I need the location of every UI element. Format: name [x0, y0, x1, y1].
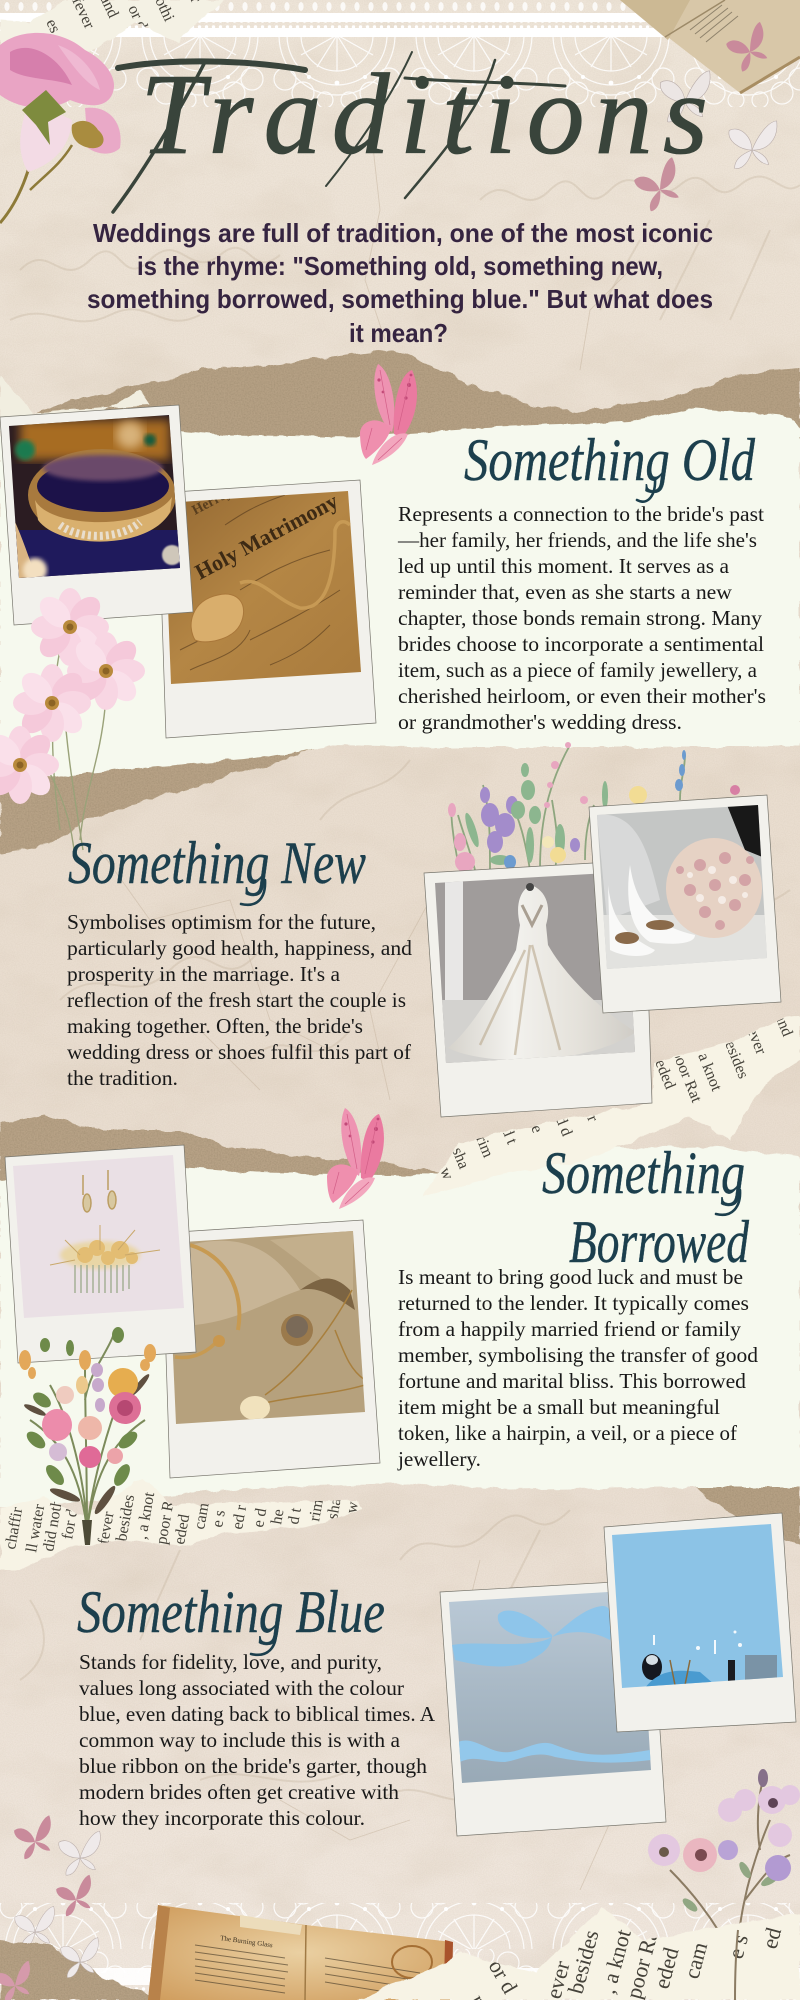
torn newspaper strip middle	[423, 1011, 800, 1197]
newspaper scrap	[0, 375, 150, 425]
body text: or grandmother's wedding dress.	[398, 710, 682, 734]
cream torn paper	[0, 408, 800, 777]
lilac flowers bottom right	[648, 1769, 800, 2000]
torn newspaper strip lower left: sha	[324, 1497, 345, 1521]
kraft torn paper	[0, 1115, 440, 1200]
butterfly: pink	[360, 364, 417, 465]
torn newspaper strip top left: or d	[124, 3, 150, 33]
torn newspaper strip lower left: poor Rat	[153, 1487, 180, 1546]
kraft torn paper upper	[0, 350, 800, 460]
body text: Symbolises optimism for the future,	[67, 910, 376, 934]
body text: blue ribbon on the bride's garter, though	[79, 1754, 427, 1778]
torn newspaper strip bottom right: , a knot	[595, 1927, 636, 1996]
intro text: something borrowed, something blue." But what does	[87, 284, 713, 314]
butterflies top right	[632, 22, 778, 213]
body text: the tradition.	[67, 1066, 178, 1090]
torn newspaper strip lower left: ed r	[229, 1503, 250, 1531]
butterfly: pink	[327, 1108, 384, 1209]
torn newspaper strip bottom right: or d	[484, 1955, 523, 1998]
intro text	[87, 218, 713, 348]
heading: Something New	[68, 830, 366, 896]
heading	[542, 1140, 750, 1275]
heading: Borrowed	[569, 1209, 750, 1275]
photo: dress polaroid	[424, 860, 652, 1117]
torn newspaper strip middle: poor Rat	[668, 1047, 705, 1106]
body text: reflection of the fresh start the couple is	[67, 988, 406, 1012]
body text: wedding dress or shoes fulfil this part of	[67, 1040, 412, 1064]
body text: Represents a connection to the bride's past	[398, 502, 764, 526]
torn newspaper strip middle: fever	[741, 1020, 770, 1058]
torn newspaper strip middle: d t	[498, 1125, 520, 1147]
torn newspaper strip bottom right	[357, 1907, 800, 2000]
body text: Is meant to bring good luck and must be	[398, 1265, 743, 1289]
body text: common way to include this is with a	[79, 1728, 400, 1752]
panel: something borrowed	[5, 1108, 758, 1478]
body text: item, such as a piece of family jewellery, a	[398, 658, 757, 682]
photo: locket polaroid	[150, 480, 376, 738]
torn newspaper strip middle: rim	[472, 1133, 497, 1161]
body text	[67, 910, 412, 1090]
torn newspaper strip lower left: he	[268, 1508, 288, 1526]
torn newspaper strip top left: es.	[42, 17, 65, 39]
body text: making together. Often, the bride's	[67, 1014, 363, 1038]
kraft torn paper lower	[0, 740, 327, 853]
body text: particularly good health, happiness, and	[67, 936, 412, 960]
body text: prosperity in the marriage. It's a	[67, 962, 340, 986]
torn newspaper strip lower left: besides	[113, 1493, 138, 1543]
title: Traditions	[140, 51, 708, 179]
photo: hair comb polaroid	[5, 1145, 196, 1363]
body text	[397, 502, 766, 734]
old book bottom: The Burning Glass	[220, 1934, 273, 1949]
torn newspaper strip bottom right: cam	[679, 1939, 712, 1981]
torn newspaper strip middle: and	[771, 1011, 796, 1039]
body text: fortune and marital bliss. This borrowed	[398, 1369, 746, 1393]
body text: brides choose to incorporate a sentimental	[398, 632, 764, 656]
bouquet	[19, 1327, 156, 1545]
photo: ring polaroid	[0, 405, 193, 625]
panel: something old	[0, 350, 800, 853]
torn newspaper strip lower left: cam	[191, 1501, 213, 1531]
body text: how they incorporate this colour.	[79, 1806, 365, 1830]
torn newspaper strip lower left: ll water	[23, 1502, 48, 1554]
body text: values long associated with the colour	[79, 1676, 404, 1700]
torn newspaper strip middle: besides	[718, 1031, 752, 1081]
body text: cherished heirloom, or even their mother's	[398, 684, 766, 708]
torn newspaper strip top left	[0, 0, 224, 52]
photo: shoes and bouquet polaroid	[589, 795, 781, 1013]
torn newspaper strip lower left	[0, 1478, 362, 1570]
body text: item might be a small but meaningful	[398, 1395, 720, 1419]
old book bottom	[148, 1905, 453, 2000]
torn newspaper strip bottom right: e s	[723, 1932, 753, 1961]
torn newspaper strip middle: am	[633, 1075, 657, 1100]
body text: member, symbolising the transfer of good	[398, 1343, 758, 1367]
body text	[397, 1265, 758, 1471]
butterflies over kraft	[0, 1933, 99, 2000]
body text: chapter, those bonds remain strong. Many	[398, 606, 762, 630]
torn newspaper strip middle: eded	[651, 1057, 678, 1092]
photo: locket polaroid: Holy Matrimony	[191, 488, 342, 584]
torn newspaper strip middle: sha	[448, 1145, 472, 1171]
torn newspaper strip middle: e s	[603, 1085, 626, 1108]
photo: blue flat lay polaroid	[604, 1513, 796, 1732]
body text: modern brides often get creative with	[79, 1780, 399, 1804]
heading: Something	[542, 1140, 745, 1206]
panel: something blue	[77, 1513, 796, 1836]
open book top right	[620, 0, 800, 93]
torn newspaper strip middle: he	[524, 1115, 546, 1136]
torn newspaper strip lower left: w	[343, 1500, 362, 1515]
lace border bottom	[0, 1903, 800, 2000]
torn newspaper strip lower left: for d	[59, 1508, 81, 1541]
torn newspaper strip lower left: d t	[285, 1506, 305, 1526]
body text: returned to the lender. It typically comes	[398, 1291, 749, 1315]
kraft torn paper right	[689, 1480, 800, 1547]
torn newspaper strip lower left: eded	[171, 1513, 193, 1546]
wildflowers	[448, 742, 740, 872]
torn newspaper strip middle: ed d	[549, 1107, 575, 1139]
intro text: it mean?	[349, 318, 448, 348]
panel: something borrowed backing	[0, 1115, 800, 1547]
body text: jewellery.	[397, 1447, 481, 1471]
body text: —her family, her friends, and the life she's	[397, 528, 757, 552]
lace border top	[0, 0, 800, 107]
photo: ribbon polaroid	[440, 1580, 666, 1836]
panel: something new	[67, 830, 412, 1090]
torn newspaper strip lower left: fever	[95, 1510, 118, 1546]
torn newspaper strip lower left: e s	[209, 1509, 229, 1529]
torn newspaper strip lower left: did nothi	[40, 1493, 67, 1553]
body text: reminder that, even as she starts a new	[398, 580, 732, 604]
body text	[79, 1650, 435, 1830]
torn newspaper strip bottom right: poor Rat	[621, 1921, 665, 2000]
cosmos flowers	[0, 588, 145, 860]
torn newspaper strip lower left: rim	[306, 1497, 327, 1523]
cream torn paper	[0, 1147, 800, 1507]
body text: led up until this moment. It serves as a	[398, 554, 729, 578]
photo: locket polaroid: Herrey	[190, 485, 234, 519]
intro text: is the rhyme: "Something old, something new,	[137, 251, 663, 281]
body text: token, like a hairpin, a veil, or a piece of	[398, 1421, 738, 1445]
torn newspaper strip bottom right: eded	[649, 1945, 684, 1991]
heading: Something Blue	[77, 1579, 385, 1645]
torn newspaper strip middle: w	[436, 1165, 457, 1183]
rose top left	[0, 33, 121, 223]
torn newspaper strip lower left: , a knot	[133, 1490, 158, 1541]
body text: blue, even dating back to biblical times. A	[79, 1702, 435, 1726]
torn newspaper strip bottom right: besides	[563, 1927, 604, 1996]
body text: from a happily married friend or family	[398, 1317, 741, 1341]
kraft torn paper bottom left	[0, 1940, 163, 2000]
body text: Stands for fidelity, love, and purity,	[79, 1650, 382, 1674]
torn newspaper strip lower left: chaffir	[2, 1505, 26, 1551]
photo: necklace polaroid	[160, 1220, 380, 1478]
torn newspaper strip middle: ed r	[576, 1095, 601, 1125]
intro text: Weddings are full of tradition, one of the most iconic	[93, 218, 713, 248]
torn newspaper strip middle: , a knot	[691, 1043, 725, 1094]
torn newspaper strip bottom right: ed	[757, 1925, 786, 1951]
butterflies bottom left	[11, 1815, 101, 1952]
torn newspaper strip lower left: e d	[250, 1507, 270, 1529]
